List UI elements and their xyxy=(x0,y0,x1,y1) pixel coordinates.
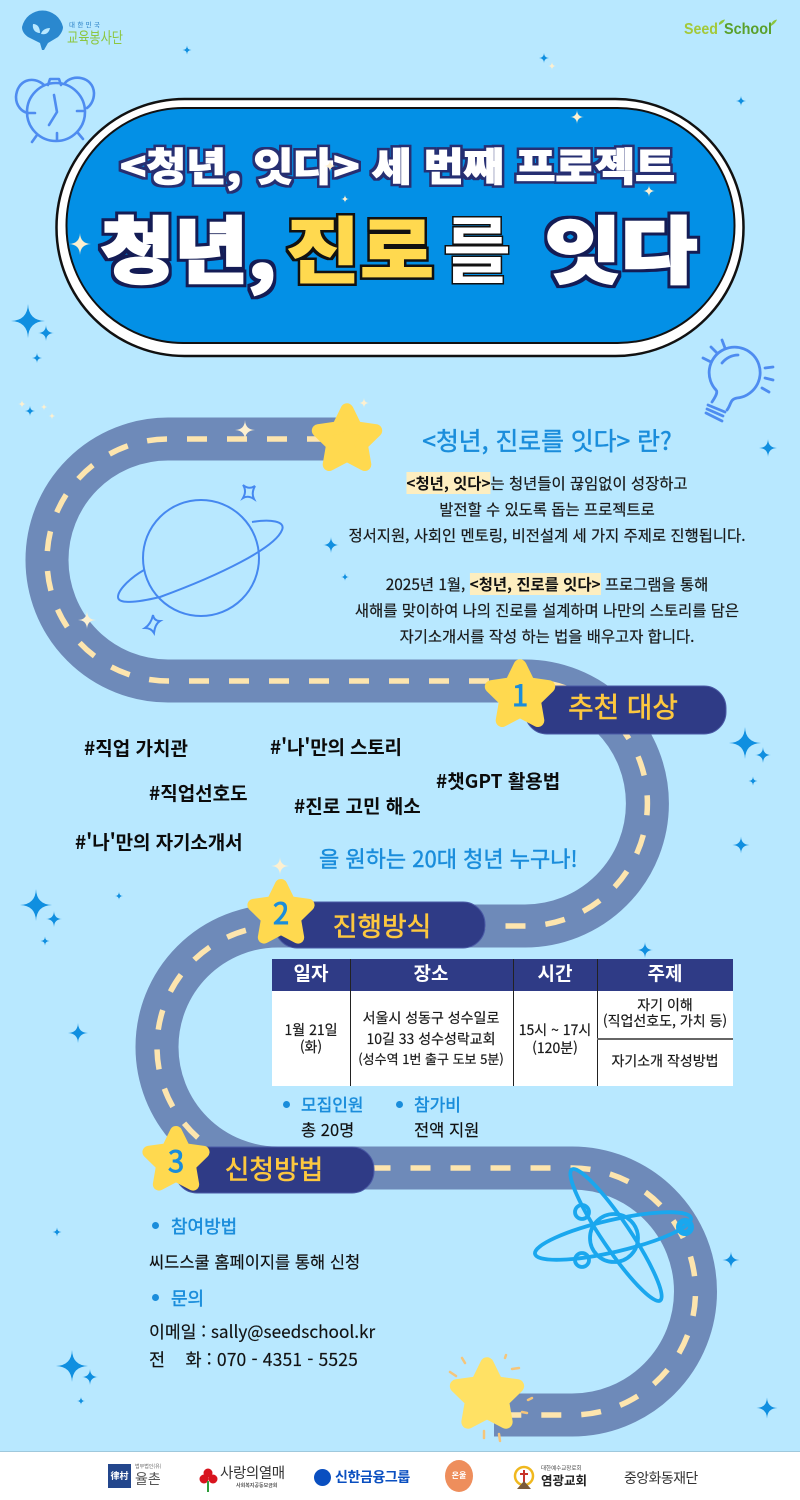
logo: 온울 xyxy=(445,1460,473,1492)
hashtag: #'나'만의 자기소개서 xyxy=(75,828,243,855)
text block: intro xyxy=(348,472,746,546)
road xyxy=(47,439,696,1415)
logo: 신한금융그룹: 신한금융그룹 xyxy=(335,1467,410,1487)
icon: light bulb xyxy=(703,340,773,421)
logo: 사랑의열매 xyxy=(200,1462,285,1492)
text: phone: 전 화 : 070 - 4351 - 5525 xyxy=(149,1347,358,1372)
hashtag: #직업선호도 xyxy=(149,779,248,806)
table cell: topic 2: 자기소개 작성방법 xyxy=(612,1051,718,1071)
title pill xyxy=(56,99,744,356)
text: how to apply: 씨드스쿨 홈페이지를 통해 신청 xyxy=(149,1249,360,1273)
title line 2: 진로 xyxy=(286,193,434,298)
info: 참가비 xyxy=(396,1091,479,1141)
logo: Seed School xyxy=(684,20,777,38)
badge: 추천 대상 bar xyxy=(525,686,726,734)
icon: planet xyxy=(118,485,283,633)
star: road end with rays xyxy=(450,1355,532,1441)
logo: Seed School: School xyxy=(724,21,772,38)
star: road start xyxy=(318,410,376,465)
logo: 사랑의열매: 사랑의열매 xyxy=(220,1462,285,1483)
logo: 온울: 온울 xyxy=(452,1470,466,1481)
heading: 신청방법: 신청방법 xyxy=(225,1148,323,1187)
title line 2: 를 xyxy=(443,193,511,298)
logo: 율촌: 律村 xyxy=(110,1469,128,1482)
step number 1: 1 xyxy=(512,673,528,715)
icon: alarm clock xyxy=(16,78,94,142)
info: 모집인원 xyxy=(283,1091,364,1141)
table cell: topic 1: 자기 이해 xyxy=(637,995,693,1015)
hashtag: #직업 가치관 xyxy=(84,734,188,761)
logo: 율촌: 법무법인(유) xyxy=(135,1463,161,1470)
step number 2: 2 xyxy=(273,891,289,933)
badge: 신청방법 bar xyxy=(175,1147,374,1193)
footer xyxy=(0,1451,800,1500)
table header: 장소: 장소 xyxy=(414,959,448,986)
text block: intro: 발전할 수 있도록 돕는 프로젝트로 xyxy=(439,498,655,520)
logo: Seed School: Seed xyxy=(684,21,718,38)
title line 2: 청년, xyxy=(101,193,276,298)
info: 모집인원: 모집인원 xyxy=(301,1091,364,1116)
hashtag: #진로 고민 해소 xyxy=(294,792,421,819)
table cell: place: 서울시 성동구 성수일로 xyxy=(363,1008,499,1028)
table cell: time: (120분) xyxy=(532,1038,578,1058)
logo: 교육봉사단: 대한민국 xyxy=(69,19,100,29)
table cell: time: 15시 ~ 17시 xyxy=(519,1020,591,1040)
table cell: topic 1: (직업선호도, 가치 등) xyxy=(603,1011,727,1031)
table header: 시간: 시간 xyxy=(538,959,572,986)
badge: 진행방식 bar xyxy=(275,902,485,948)
logo: 염광교회 xyxy=(514,1464,587,1489)
logo: 율촌: 율촌 xyxy=(135,1469,161,1489)
callout: 을 원하는 20대 청년 누구나! xyxy=(319,842,578,874)
logo: 교육봉사단 xyxy=(22,11,123,50)
step number 3: 3 xyxy=(168,1139,184,1181)
text block: intro: 정서지원, 사회인 멘토링, 비전설계 세 가지 주제로 진행됩니다. xyxy=(348,524,746,546)
logo: 염광교회: 대한예수교장로회 xyxy=(541,1464,581,1472)
logo: 율촌 xyxy=(108,1463,161,1489)
text block: intro: <청년, 잇다>는 청년들이 끊임없이 성장하고 xyxy=(406,472,688,494)
info: 참가비: 참가비 xyxy=(414,1091,461,1116)
text block: program: 자기소개서를 작성 하는 법을 배우고자 합니다. xyxy=(400,625,694,647)
table cell: place xyxy=(358,1008,504,1068)
star: step 1 xyxy=(491,666,549,721)
text block: program: 2025년 1월, <청년, 진로를 잇다> 프로그램을 통해 xyxy=(386,573,708,595)
table header: 일자: 일자 xyxy=(294,959,328,986)
table cell: date: 1월 21일 xyxy=(284,1020,338,1040)
logo: 염광교회: 염광교회 xyxy=(541,1470,587,1489)
bullet: 문의: 문의 xyxy=(171,1285,204,1311)
title line 1: <청년, 잇다> 세 번째 프로젝트 xyxy=(120,137,675,193)
title line 2 xyxy=(101,193,697,298)
heading: 진행방식: 진행방식 xyxy=(333,905,431,944)
table cell: place: (성수역 1번 출구 도보 5분) xyxy=(358,1049,504,1068)
bullet: 문의 xyxy=(152,1285,204,1311)
text block: program xyxy=(355,573,739,647)
table cell: time xyxy=(519,1020,591,1058)
table header: 주제: 주제 xyxy=(648,959,682,986)
text: email: 이메일 : sally@seedschool.kr xyxy=(149,1318,375,1343)
info: 모집인원: 총 20명 xyxy=(301,1117,354,1141)
hashtag: #'나'만의 스토리 xyxy=(270,733,402,760)
title line 2: 잇다 xyxy=(545,193,697,298)
table cell: date: (화) xyxy=(300,1037,322,1057)
icon: atom xyxy=(531,1162,695,1308)
logo: 중앙화동재단: 중앙화동재단 xyxy=(624,1468,698,1488)
text block: program: 새해를 맞이하여 나의 진로를 설계하며 나만의 스토리를 담은 xyxy=(355,599,739,621)
table cell: place: 10길 33 성수성락교회 xyxy=(366,1028,496,1048)
sparkles over title xyxy=(69,160,655,255)
heading: 추천 대상: 추천 대상 xyxy=(568,685,678,725)
logo: 사랑의열매: 사회복지공동모금회 xyxy=(236,1482,277,1489)
table xyxy=(272,959,733,1086)
heading: about: <청년, 진로를 잇다> 란? xyxy=(422,422,672,458)
table cell: topic 1 xyxy=(603,995,727,1031)
hashtag: #챗GPT 활용법 xyxy=(436,767,560,794)
bullet: 참여방법: 참여방법 xyxy=(171,1213,237,1239)
table cell: date xyxy=(284,1020,338,1057)
star: step 3 xyxy=(149,1132,203,1184)
star: step 2 xyxy=(254,885,308,937)
logo: 교육봉사단: 교육봉사단 xyxy=(67,26,123,48)
info: 참가비: 전액 지원 xyxy=(414,1117,479,1141)
